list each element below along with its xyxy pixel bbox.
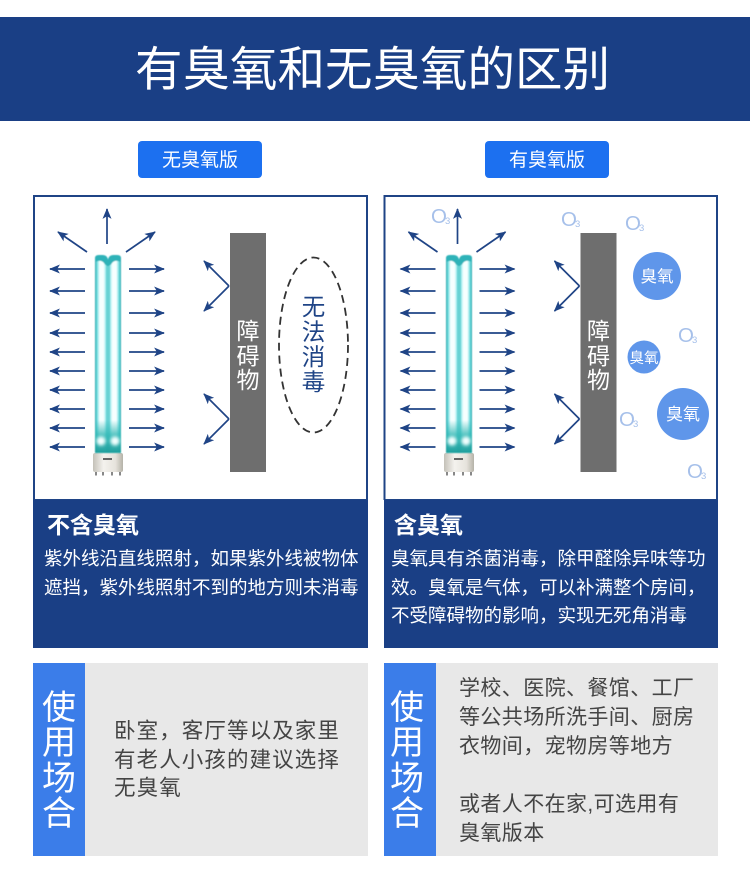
obstacle: 物: [236, 367, 260, 393]
O3 labels: [431, 205, 706, 483]
button: ozone version: [485, 141, 609, 178]
usage label: 使: [390, 689, 424, 727]
ozone bubbles: 臭氧: [630, 350, 658, 367]
usage label: 场: [42, 760, 76, 798]
panel: ozone description: [384, 500, 718, 648]
panel: no-ozone usage: [33, 663, 368, 856]
usage text: [114, 719, 340, 800]
button: no-ozone version: 无臭氧版: [162, 150, 238, 171]
header banner: [0, 17, 750, 121]
description text: 遮挡，紫外线照射不到的地方则未消毒: [44, 577, 359, 598]
unreachable zone: [279, 258, 348, 432]
unreachable zone: 消: [302, 344, 325, 370]
usage label: 使: [42, 689, 76, 727]
O3 labels: 3: [639, 223, 644, 234]
button: no-ozone version: [138, 141, 262, 178]
light ray arrows: [400, 209, 580, 447]
O3 labels: O: [687, 460, 703, 483]
usage text: 无臭氧: [114, 776, 182, 800]
ozone bubbles: 臭氧: [666, 405, 700, 424]
heading: 不含臭氧: [47, 512, 139, 538]
usage label: [384, 663, 436, 856]
unreachable zone: 毒: [302, 369, 325, 395]
usage text: 等公共场所洗手间、厨房: [459, 706, 694, 729]
O3 labels: O: [625, 212, 641, 235]
obstacle: 障: [236, 318, 260, 344]
obstacle: [230, 233, 266, 472]
O3 labels: 3: [445, 216, 450, 227]
description text: 不受障碍物的影响，实现无死角消毒: [391, 605, 687, 626]
usage text: 卧室，客厅等以及家里: [114, 719, 340, 743]
O3 labels: O: [431, 205, 447, 228]
O3 labels: 3: [692, 335, 697, 346]
description text: 效。臭氧是气体，可以补满整个房间，: [391, 577, 706, 598]
panel: no-ozone description: [33, 500, 368, 648]
obstacle: [580, 233, 616, 472]
usage label: 用: [42, 724, 76, 762]
O3 labels: O: [561, 208, 577, 231]
light ray arrows: [50, 209, 229, 447]
panel: ozone diagram: [384, 195, 718, 500]
description text: 臭氧具有杀菌消毒，除甲醛除异味等功: [391, 548, 706, 569]
panel: no-ozone diagram: [33, 195, 368, 500]
usage label: 场: [390, 760, 424, 798]
UV lamp: [93, 255, 123, 476]
UV lamp: [444, 255, 474, 476]
panel: ozone usage: [384, 663, 718, 856]
usage text: 或者人不在家,可选用有: [459, 793, 679, 816]
usage label: 合: [42, 795, 76, 833]
usage text: 衣物间，宠物房等地方: [459, 735, 673, 758]
unreachable zone: 法: [302, 319, 325, 345]
O3 labels: 3: [575, 219, 580, 230]
usage text: [459, 676, 694, 845]
heading: 含臭氧: [394, 512, 463, 538]
usage label: 用: [390, 724, 424, 762]
description text: 紫外线沿直线照射，如果紫外线被物体: [44, 548, 359, 569]
button: ozone version: 有臭氧版: [509, 150, 585, 171]
obstacle: 碍: [236, 343, 260, 369]
unreachable zone: 无: [302, 294, 325, 320]
usage text: 臭氧版本: [459, 822, 545, 845]
description text: [391, 548, 706, 626]
ozone bubbles: [628, 252, 709, 440]
usage text: 学校、医院、餐馆、工厂: [459, 677, 694, 700]
title: 有臭氧和无臭氧的区别: [135, 44, 610, 97]
O3 labels: 3: [633, 419, 638, 430]
description text: [44, 548, 359, 598]
usage text: 有老人小孩的建议选择: [114, 748, 340, 772]
ozone bubbles: 臭氧: [640, 267, 674, 286]
O3 labels: O: [678, 324, 694, 347]
usage label: [33, 663, 85, 856]
O3 labels: O: [619, 408, 635, 431]
O3 labels: 3: [701, 471, 706, 482]
usage label: 合: [390, 795, 424, 833]
